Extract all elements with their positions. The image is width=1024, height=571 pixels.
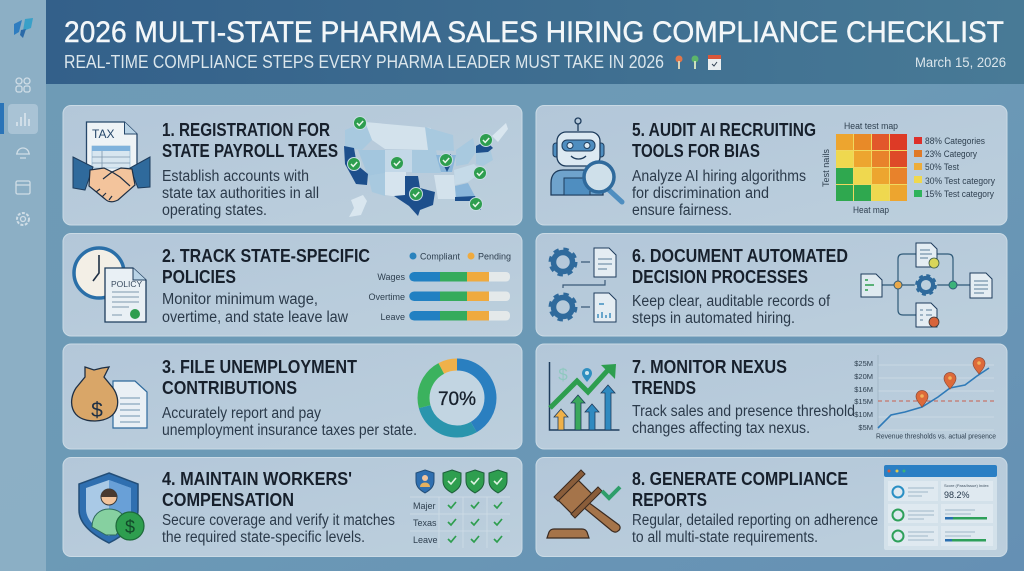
- revenue threshold line chart: $16M: [854, 385, 873, 394]
- panel 8: compliance reports: REPORTS: [632, 490, 707, 510]
- panel 5: AI audit: ensure fairness.: [632, 202, 732, 219]
- description: Track sales and presence threshold: [632, 403, 855, 420]
- heading: 1. REGISTRATION FOR: [162, 120, 330, 140]
- panel 8: compliance reports: [536, 458, 1007, 556]
- heat map: Heat map: [853, 205, 889, 215]
- heat map: [821, 121, 995, 215]
- description: Keep clear, auditable records of: [632, 293, 831, 310]
- panel 3: unemployment: unemployment insurance taxes per state.: [162, 422, 417, 439]
- panel 2: policies: [63, 234, 522, 336]
- icon: bell: [16, 148, 30, 158]
- icon: clock and policy document: POLICY: [111, 279, 143, 289]
- panel 7: nexus trends: TRENDS: [632, 378, 696, 398]
- heading: 6. DOCUMENT AUTOMATED: [632, 246, 848, 266]
- panel 6: automated decisions: steps in automated hiring.: [632, 310, 795, 327]
- icon: settings: [17, 213, 29, 225]
- description: Regular, detailed reporting on adherence: [632, 512, 878, 529]
- panel 4: workers compensation: the required state-specific levels.: [162, 529, 365, 546]
- icon: gavel and check: [547, 470, 620, 538]
- icon: growth chart: [550, 362, 620, 430]
- date: March 15, 2026: [915, 55, 1006, 70]
- revenue threshold line chart: $5M: [858, 423, 873, 432]
- sidebar: [0, 0, 46, 571]
- status bar chart: Wages: [377, 272, 405, 282]
- panel 4: workers compensation: [63, 458, 522, 556]
- panel 8: compliance reports: to all multi-state requirements.: [632, 529, 818, 546]
- icons: pins and calendar: [676, 55, 721, 70]
- icon: shield with person and dollar: $: [125, 517, 135, 537]
- heading: 8. GENERATE COMPLIANCE: [632, 469, 848, 489]
- icon: gears and documents: [550, 248, 616, 322]
- icon: shield with person and dollar: [79, 473, 144, 543]
- panel 1: registration: STATE PAYROLL TAXES: [162, 141, 338, 161]
- panel 2: policies: overtime, and state leave law: [162, 309, 349, 326]
- description: Establish accounts with: [162, 168, 309, 185]
- panel 3: unemployment: CONTRIBUTIONS: [162, 378, 297, 398]
- heading: 3. FILE UNEMPLOYMENT: [162, 357, 357, 377]
- panel 1: registration: [63, 106, 522, 225]
- status bar chart: Leave: [380, 312, 405, 322]
- icon: growth chart: $: [558, 365, 568, 384]
- revenue threshold line chart: $25M: [854, 359, 873, 368]
- header band: [46, 0, 1024, 84]
- panel 4: workers compensation: COMPENSATION: [162, 490, 294, 510]
- heat map legend: 50% Test: [925, 162, 959, 172]
- status bar chart: Pending: [478, 252, 511, 262]
- US state map with check markers: [344, 116, 508, 217]
- icon: tax document and handshake: TAX: [92, 127, 114, 141]
- panel 6: automated decisions: [536, 234, 1007, 336]
- heat map legend: 88% Categories: [925, 136, 985, 146]
- revenue threshold line chart: $10M: [854, 410, 873, 419]
- report dashboard mockup: 98.2%: [944, 490, 970, 500]
- icon: robot with magnifier: [551, 118, 622, 202]
- panel 2: policies: POLICIES: [162, 267, 236, 287]
- panel 5: AI audit: TOOLS FOR BIAS: [632, 141, 760, 161]
- panel 5: AI audit: [536, 106, 1007, 225]
- heat map legend: 30% Test category: [925, 176, 995, 186]
- icon: money bag and document: [72, 367, 147, 428]
- revenue threshold line chart: $15M: [854, 397, 873, 406]
- report dashboard mockup: [884, 465, 997, 550]
- panel 1: registration: operating states.: [162, 202, 267, 219]
- revenue threshold line chart: Revenue thresholds vs. actual presence: [876, 432, 996, 440]
- state coverage check table: Majer: [413, 501, 436, 511]
- icon: money bag and document: $: [91, 399, 103, 422]
- icon: calendar: [16, 181, 30, 194]
- icon: tax document and handshake: [73, 122, 150, 202]
- heading: 4. MAINTAIN WORKERS': [162, 469, 352, 489]
- panel 7: nexus trends: [536, 344, 1007, 449]
- revenue threshold line chart: $20M: [854, 372, 873, 381]
- panel 7: nexus trends: changes affecting tax nexus.: [632, 420, 810, 437]
- process flow diagram: [861, 243, 992, 327]
- status bar chart: [368, 252, 511, 322]
- status bar chart: Overtime: [368, 292, 405, 302]
- heading: 7. MONITOR NEXUS: [632, 357, 787, 377]
- panel 6: automated decisions: DECISION PROCESSES: [632, 267, 808, 287]
- icon: clock and policy document: [74, 248, 146, 322]
- heat map legend: 15% Test category: [925, 189, 994, 199]
- state coverage check table: [410, 470, 510, 548]
- state coverage check table: Leave: [413, 535, 438, 545]
- description: Secure coverage and verify it matches: [162, 512, 395, 529]
- heat map legend: 23% Category: [925, 149, 977, 159]
- heading: 2. TRACK STATE-SPECIFIC: [162, 246, 370, 266]
- icon: dashboard grid: [16, 78, 30, 92]
- heat map: Test nails: [821, 149, 831, 187]
- status bar chart: Compliant: [420, 252, 460, 262]
- subtitle: REAL-TIME COMPLIANCE STEPS EVERY PHARMA LEADER MUST TAKE IN 2026: [64, 51, 664, 72]
- report dashboard mockup: Score (Pass/Issue) Index: [944, 483, 989, 488]
- panel 1: registration: state tax authorities in all: [162, 185, 319, 202]
- revenue threshold line chart: [854, 355, 996, 440]
- icon: logo: [14, 18, 33, 38]
- active nav item: charts: [0, 103, 38, 134]
- donut chart 70%: 70%: [438, 389, 476, 410]
- state coverage check table: Texas: [413, 518, 437, 528]
- description: Accurately report and pay: [162, 405, 321, 422]
- heat map legend: [914, 136, 995, 199]
- heat map: Heat test map: [844, 121, 898, 131]
- heading: 5. AUDIT AI RECRUITING: [632, 120, 816, 140]
- panel 3: unemployment: [63, 344, 522, 449]
- panel 5: AI audit: for discrimination and: [632, 185, 769, 202]
- description: Monitor minimum wage,: [162, 291, 318, 308]
- donut chart 70%: [424, 364, 490, 432]
- description: Analyze AI hiring algorithms: [632, 168, 806, 185]
